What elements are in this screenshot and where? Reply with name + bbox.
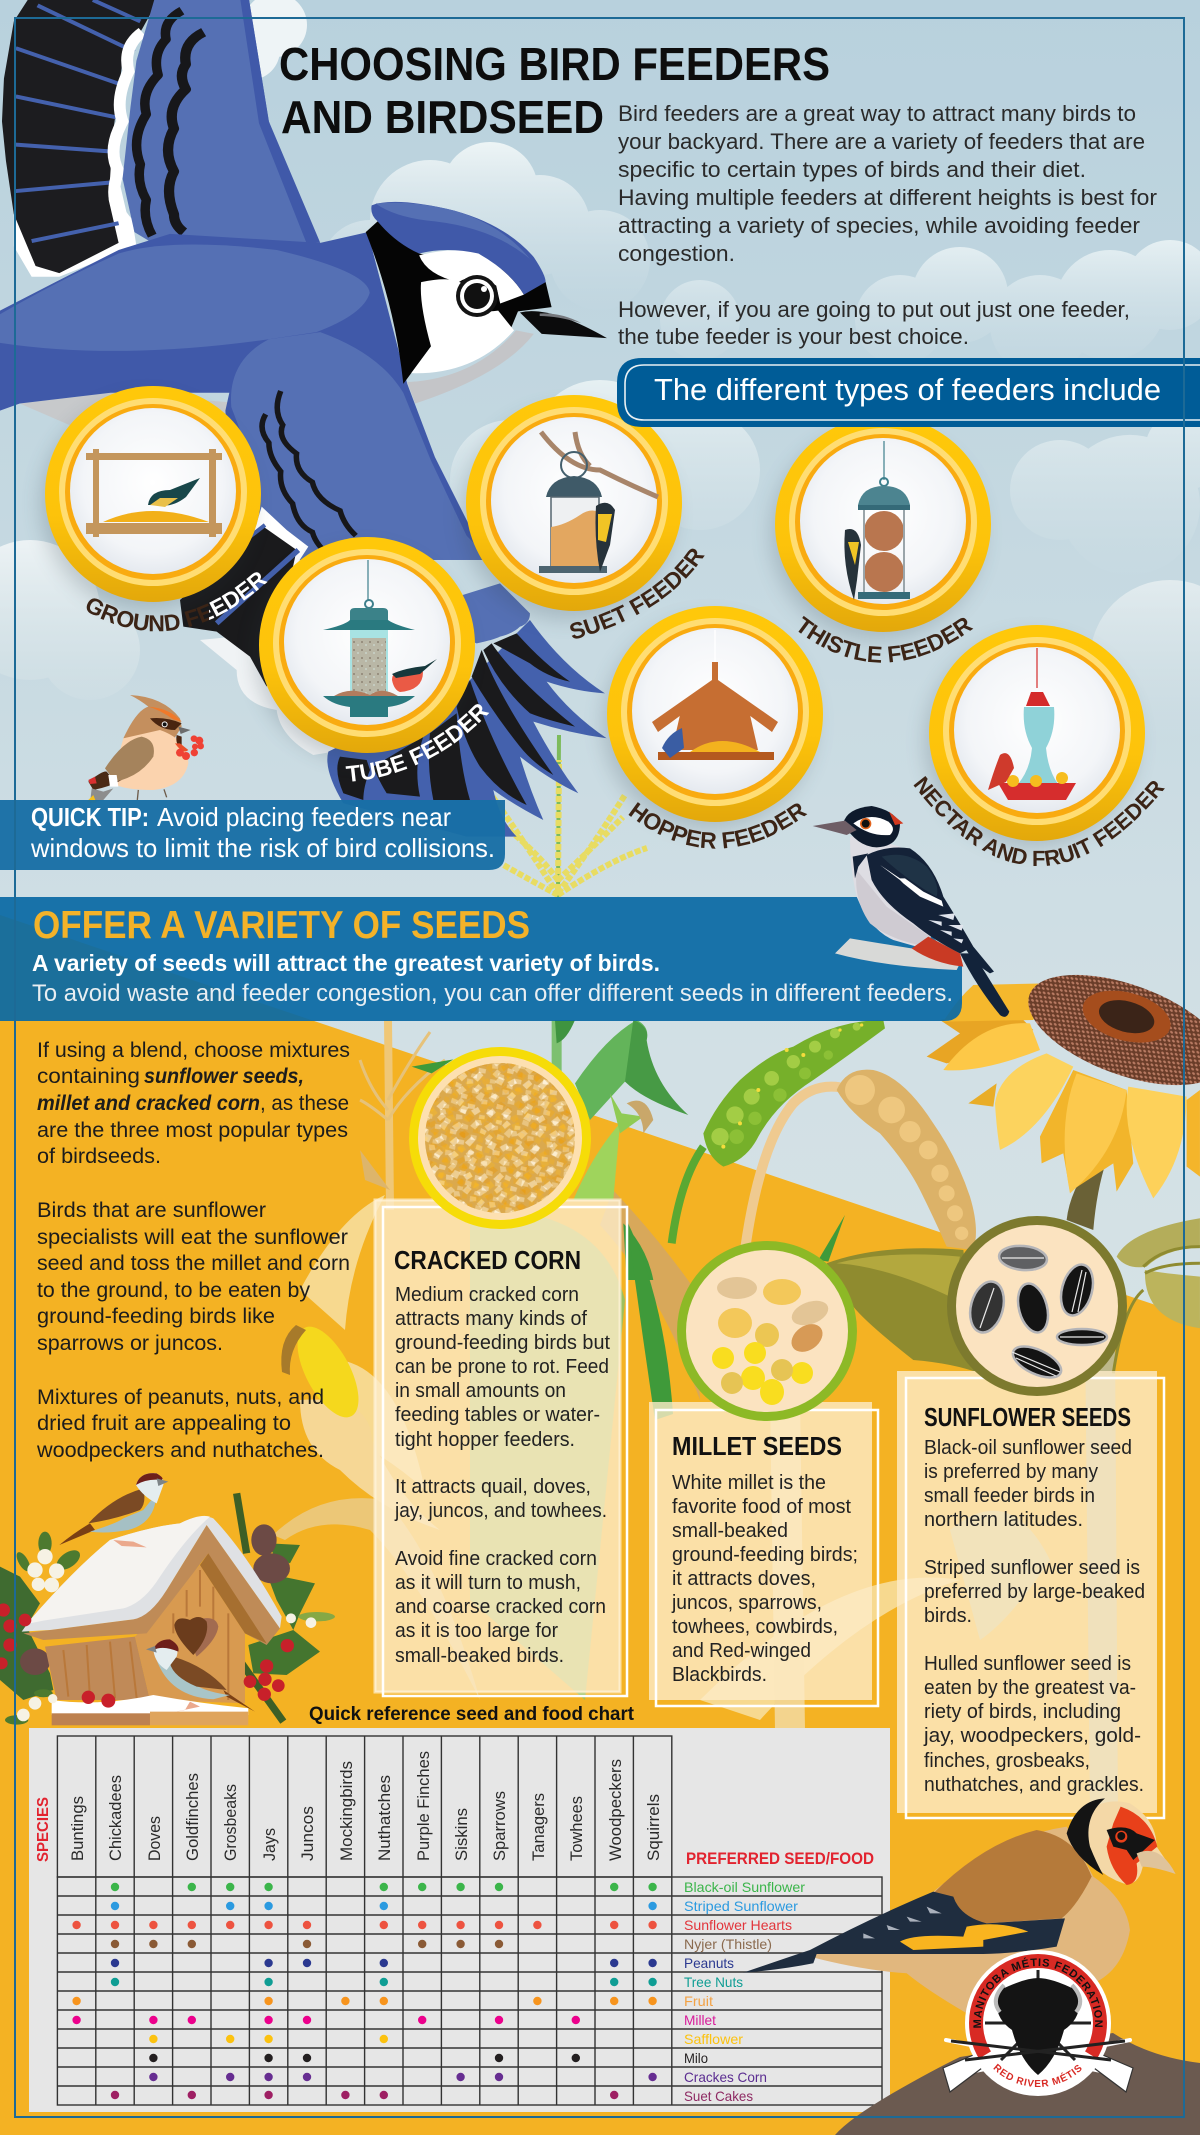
intro text: However, if you are going to put out just one feeder,	[618, 297, 1130, 322]
left text: sunflower specialists	[37, 1199, 350, 1355]
intro text: specific to certain types of birds and their diet.	[618, 157, 1086, 182]
heading: MILLET SEEDS	[672, 1431, 842, 1461]
heading: SUNFLOWER SEEDS	[924, 1402, 1131, 1432]
red berries	[0, 1603, 294, 1708]
card text	[923, 1437, 1145, 1796]
jay fan feathers	[2, 0, 158, 273]
card: millet seeds	[649, 1402, 878, 1706]
feeder types banner	[617, 358, 1200, 427]
species labels: Woodpeckers	[606, 1759, 625, 1861]
feeder badge: hopper feeder	[603, 606, 823, 830]
head	[843, 806, 900, 847]
black wing panel	[180, 527, 297, 687]
intro text: Bird feeders are a great way to attract many birds to	[618, 101, 1136, 126]
intro text: Having multiple feeders at different heights is best for	[618, 185, 1157, 210]
card text	[394, 1284, 610, 1667]
left text: peanuts and nuts: Mixtures of peanuts, nuts, and	[37, 1386, 324, 1409]
species labels: Nuthatches	[375, 1775, 394, 1861]
card text: Hulled sunflower seed is	[924, 1653, 1131, 1675]
species labels: Buntings	[68, 1796, 87, 1861]
roof trim	[23, 1525, 280, 1645]
quick tip box	[0, 800, 505, 870]
jay cheek	[411, 279, 514, 373]
card text: is preferred by many	[924, 1461, 1098, 1483]
card text: in small amounts on	[395, 1380, 566, 1402]
back petals	[927, 1010, 1033, 1063]
food labels: Milo	[684, 2050, 708, 2066]
heading: CRACKED CORN	[394, 1245, 581, 1275]
card text: small-beaked	[672, 1520, 788, 1542]
leaves	[827, 1248, 980, 1373]
card text: nuthatches, and grackles.	[924, 1774, 1144, 1796]
stem	[1067, 1160, 1107, 1230]
label: nectar and fruit feeder: NECTAR AND FRUIT FEEDER	[914, 776, 1165, 866]
rifles	[946, 2040, 1130, 2076]
card text: jay, juncos, and towhees.	[394, 1500, 607, 1522]
banner note: To avoid waste and feeder congestion, you can offer different seeds in different feeders.	[32, 980, 953, 1007]
feeder badge: nectar and fruit feeder	[925, 625, 1145, 848]
jay body dark	[0, 232, 514, 560]
corn tassel	[490, 735, 647, 897]
house base	[52, 1695, 248, 1715]
sparrow at door	[146, 1639, 255, 1713]
species labels: Sparrows	[490, 1791, 509, 1861]
banner heading: OFFER A VARIETY OF SEEDS	[33, 904, 530, 947]
card text: and Red-winged	[672, 1640, 811, 1662]
dots: nyjer	[111, 1940, 503, 1948]
jay crest	[371, 202, 546, 295]
food labels: Fruit	[684, 1993, 713, 2009]
species labels: Purple Finches	[414, 1751, 433, 1861]
chart panel	[29, 1728, 890, 2112]
left text: blend advice: , as these	[260, 1092, 349, 1115]
dots: milo	[149, 2054, 580, 2062]
table grid	[57, 1736, 882, 2105]
feeder badge: thistle feeder	[771, 416, 991, 640]
species labels: Goldfinches	[183, 1773, 202, 1861]
card text: Black-oil sunflower seed	[924, 1437, 1132, 1459]
jay lower wing scallops	[262, 391, 356, 557]
card text: Blackbirds.	[672, 1664, 767, 1686]
card text: White millet is the	[672, 1472, 826, 1494]
banner bold line: A variety of seeds will attract the greatest variety of birds.	[32, 950, 660, 976]
card text: eaten by the greatest va-	[924, 1677, 1136, 1699]
food labels: Millet	[684, 2012, 716, 2028]
species labels: Squirrels	[644, 1794, 663, 1861]
cloud: upper centre	[320, 142, 650, 320]
body	[850, 837, 933, 950]
icon: suet cage	[539, 432, 658, 573]
jay grey belly	[20, 393, 245, 446]
seed circle: millet	[677, 1241, 857, 1421]
jay white fan edge	[14, 32, 138, 277]
dots: safflower	[149, 2035, 388, 2043]
card text: It attracts quail, doves,	[395, 1476, 591, 1498]
corn cob	[281, 1318, 440, 1530]
label: hopper feeder: HOPPER FEEDER	[628, 802, 808, 849]
cloud: lower	[0, 540, 1200, 740]
holly right	[248, 1543, 320, 1675]
jay lower feathers	[180, 507, 607, 837]
card text: as it will turn to mush,	[395, 1572, 581, 1594]
card text: feeding tables or water-	[395, 1404, 600, 1426]
food labels: Striped Sunflower	[684, 1898, 798, 1914]
left text: peanuts and nuts: woodpeckers and nuthatches.	[36, 1439, 324, 1462]
front petals	[943, 1023, 1040, 1070]
left text: blend advice	[37, 1039, 350, 1168]
quick tip box: Avoid placing feeders near	[157, 802, 451, 832]
roof snow shadow	[22, 1517, 282, 1632]
feeder badge: ground feeder	[41, 386, 261, 610]
card text	[671, 1472, 858, 1686]
card text: northern latitudes.	[924, 1509, 1083, 1531]
label: suet feeder: SUET FEEDER	[570, 548, 705, 639]
left text: blend advice: are the three most popular types	[37, 1119, 348, 1142]
card text: small feeder birds in	[924, 1485, 1095, 1507]
roof snow	[27, 1516, 210, 1624]
cloud: middle	[450, 380, 1200, 575]
dots: sunflower hearts	[72, 1921, 657, 1929]
quick tip box: windows to limit the risk of bird collisions.	[30, 833, 495, 863]
mistletoe leaves	[5, 1532, 83, 1725]
icon: platform feeder	[86, 449, 222, 537]
label: tube feeder: TUBE FEEDER	[346, 704, 490, 782]
food labels	[684, 1879, 805, 2104]
title	[279, 38, 830, 143]
title: CHOOSING BIRD FEEDERS	[279, 38, 830, 90]
red vent	[912, 937, 963, 967]
feeder badge: tube feeder	[255, 537, 475, 760]
species labels: Towhees	[567, 1796, 586, 1861]
jay body light	[0, 245, 370, 351]
bottom banner	[985, 2055, 1091, 2085]
quick tip box: QUICK TIP:	[31, 802, 149, 832]
species labels: Jays	[260, 1828, 279, 1861]
left text: blend advice: of birdseeds.	[37, 1145, 161, 1168]
black feathers	[337, 633, 575, 805]
rock	[835, 2033, 1200, 2135]
logo text: MANITOBA MÉTIS FEDERATION	[973, 1957, 1103, 2028]
card text: Striped sunflower seed is	[924, 1557, 1140, 1579]
cloud: right	[660, 240, 1200, 375]
feather shadows	[200, 633, 343, 755]
pine needles	[237, 1493, 283, 1722]
card text: as it is too large for	[395, 1620, 558, 1642]
species labels: Grosbeaks	[221, 1784, 240, 1861]
label: thistle feeder: THISTLE FEEDER	[798, 616, 974, 663]
dots: striped sunflower	[111, 1902, 657, 1910]
left text: peanuts and nuts: dried fruit are appealing to	[37, 1412, 291, 1435]
house walls	[45, 1637, 150, 1700]
pale background plants	[273, 1020, 1118, 1815]
card text: can be prone to rot. Feed	[395, 1356, 609, 1378]
food labels: Black-oil Sunflower	[684, 1879, 805, 1895]
intro text: congestion.	[618, 241, 735, 266]
food labels: Peanuts	[684, 1955, 734, 1971]
species labels: Chickadees	[106, 1775, 125, 1861]
intro text: the tube feeder is your best choice.	[618, 324, 969, 349]
feeder labels	[86, 548, 1165, 866]
rifle barrels	[951, 2041, 1125, 2060]
card text: finches, grosbeaks,	[924, 1750, 1090, 1772]
dots: tree nuts	[111, 1978, 657, 1986]
card text: juncos, sparrows,	[671, 1592, 822, 1614]
dots: millet	[72, 2016, 580, 2024]
left text: sunflower specialists: seed and toss the millet and corn	[37, 1252, 350, 1275]
blue wing scallop end	[433, 583, 530, 643]
dots: suet cakes	[111, 2091, 618, 2099]
left text: sunflower specialists: specialists will eat the sunflower	[37, 1226, 348, 1249]
dots: black-oil sunflower	[111, 1883, 657, 1891]
feeder badge: suet feeder	[462, 395, 682, 620]
card text: ground-feeding birds but	[395, 1332, 610, 1354]
sparrow on roof	[59, 1473, 168, 1547]
species labels: Tanagers	[529, 1793, 548, 1861]
card text: Avoid fine cracked corn	[395, 1548, 597, 1570]
food labels: Suet Cakes	[684, 2088, 753, 2104]
species labels: Siskins	[452, 1808, 471, 1861]
card text: and coarse cracked corn	[395, 1596, 606, 1618]
card text: jay, woodpeckers, gold-	[923, 1725, 1141, 1747]
seed variety banner	[0, 897, 962, 1021]
food labels: Nyjer (Thistle)	[684, 1936, 772, 1952]
card text: Medium cracked corn	[395, 1284, 579, 1306]
feeder types banner: The different types of feeders include	[654, 372, 1161, 407]
wheel spokes	[985, 1970, 1091, 2070]
card text: riety of birds, including	[924, 1701, 1121, 1723]
label: ground feeder: GROUND FEEDER	[86, 572, 268, 632]
food labels: Safflower	[684, 2031, 743, 2047]
left text: blend advice: containing	[37, 1065, 140, 1088]
species heading: SPECIES	[35, 1797, 52, 1862]
icon: nectar feeder	[988, 648, 1076, 800]
cloud: behind wing tip	[220, 0, 307, 80]
heart entrance	[187, 1618, 218, 1657]
perch	[835, 938, 963, 970]
icon: hopper feeder	[652, 630, 778, 760]
jay eye	[456, 275, 498, 317]
left text: peanuts and nuts	[36, 1386, 324, 1462]
jay beak	[520, 311, 607, 338]
seed head	[1014, 952, 1200, 1108]
logo bottom text: RED RIVER MÉTIS	[993, 2064, 1082, 2087]
species labels: Doves	[145, 1816, 164, 1861]
left text: sunflower specialists: Birds that are sunflower	[37, 1199, 266, 1222]
left text: sunflower specialists: sparrows or juncos.	[37, 1332, 223, 1355]
dots: fruit	[72, 1997, 657, 2005]
pine cones	[20, 1524, 290, 1675]
species labels	[68, 1751, 663, 1861]
jay upper wing	[123, 0, 320, 246]
white berries	[17, 1549, 316, 1721]
bison	[997, 1978, 1079, 2075]
left text: sunflower specialists: to the ground, to be eaten by	[37, 1279, 311, 1302]
bird house with holly	[0, 1473, 335, 1725]
card: sunflower seeds	[897, 1371, 1164, 1818]
preferred food heading: PREFERRED SEED/FOOD	[686, 1849, 874, 1868]
card text: it attracts doves,	[672, 1568, 816, 1590]
plant: foxtail millet	[672, 1020, 885, 1243]
food labels: Crackes Corn	[684, 2069, 767, 2085]
left text: blend advice: millet and cracked corn	[37, 1092, 260, 1115]
chart title: Quick reference seed and food chart	[309, 1704, 635, 1725]
wing	[867, 847, 973, 953]
left text: blend advice: If using a blend, choose mixtures	[37, 1039, 350, 1062]
intro text	[618, 101, 1157, 349]
blue silhouette	[327, 620, 607, 837]
jay head black	[366, 221, 552, 384]
left text: sunflower specialists: ground-feeding birds like	[37, 1305, 275, 1328]
seed circle: cracked corn	[409, 1047, 591, 1229]
plant: green blade	[627, 1221, 673, 1420]
yellow ground	[0, 915, 1200, 2135]
plant: tan millet	[745, 1070, 976, 1250]
card text: favorite food of most	[672, 1496, 851, 1518]
title: AND BIRDSEED	[281, 91, 604, 143]
species labels: Mockingbirds	[337, 1761, 356, 1861]
card text: small-beaked birds.	[395, 1645, 564, 1667]
intro text: attracting a variety of species, while avoiding feeder	[618, 213, 1140, 238]
tail	[960, 953, 1009, 1017]
intro text: your backyard. There are a variety of feeders that are	[618, 129, 1145, 154]
card text: preferred by large-beaked	[924, 1581, 1145, 1603]
waxwing bird	[87, 695, 204, 803]
card text: towhees, cowbirds,	[672, 1616, 838, 1638]
dots: peanuts	[111, 1959, 657, 1967]
food labels: Sunflower Hearts	[684, 1917, 792, 1933]
card text: ground-feeding birds;	[672, 1544, 858, 1566]
icon: tube feeder	[323, 560, 437, 717]
icon: seed ball feeder	[844, 441, 910, 600]
sunflower	[818, 952, 1200, 1373]
left text: blend advice: sunflower seeds,	[144, 1065, 304, 1088]
card: cracked corn	[375, 1200, 627, 1696]
dots: cracked corn	[149, 2073, 657, 2081]
seed circle: sunflower	[947, 1216, 1127, 1396]
holly left	[0, 1567, 53, 1700]
food labels: Tree Nuts	[684, 1974, 743, 1990]
species labels: Juncos	[298, 1806, 317, 1861]
logo: Manitoba Metis Federation	[942, 1950, 1134, 2096]
woodpecker	[813, 806, 1009, 1017]
card text: attracts many kinds of	[395, 1308, 587, 1330]
plant: corn stalk and leaves	[412, 1020, 688, 1280]
card text: tight hopper feeders.	[395, 1429, 575, 1451]
card text: birds.	[924, 1605, 972, 1627]
goldfinch	[743, 1798, 1176, 2014]
blue jay	[0, 0, 607, 560]
